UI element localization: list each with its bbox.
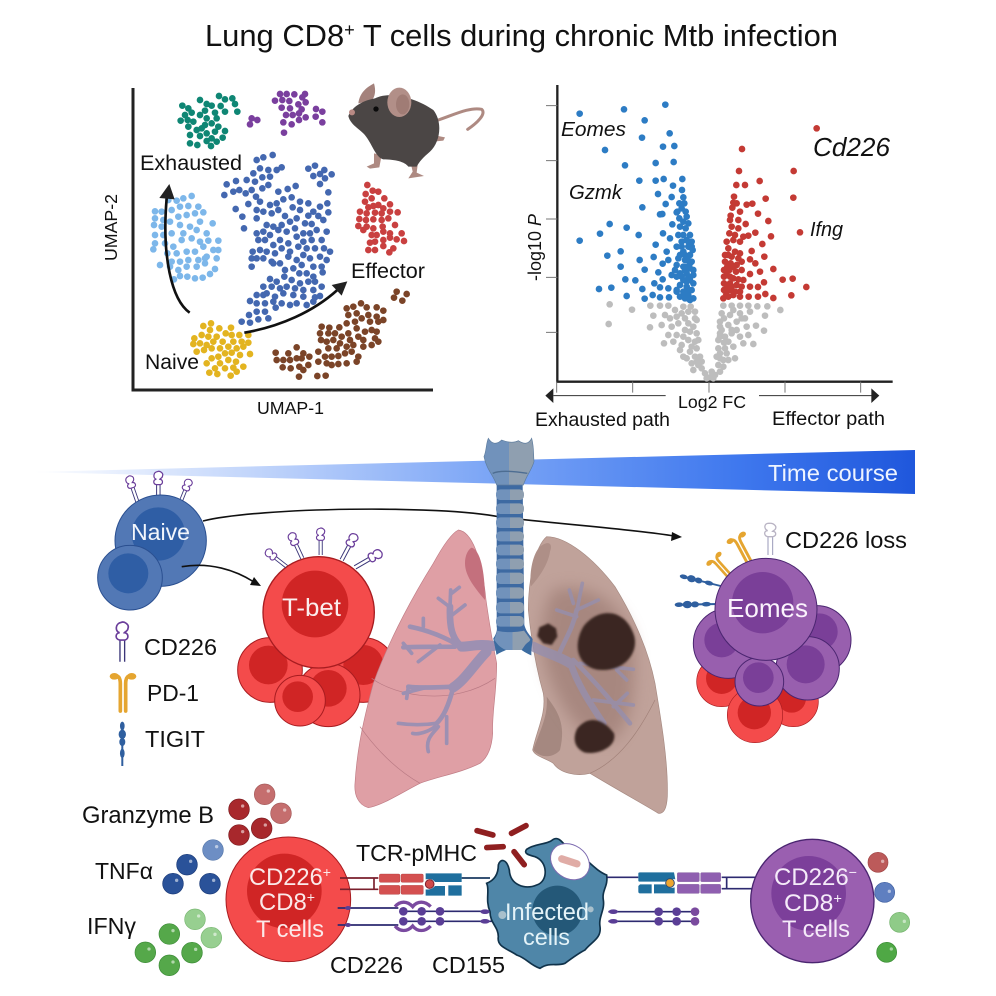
CD226-CD155 synapse left	[338, 902, 497, 930]
gold naive cluster	[193, 323, 250, 376]
label: CD8+ second: CD8	[784, 891, 831, 917]
x-axis label: Log2 FC	[678, 392, 746, 412]
label: PD-1: PD-1	[147, 680, 199, 706]
label: T cells second: T cells	[782, 917, 850, 943]
TIGIT receptors on Eomes cell	[675, 572, 722, 608]
label: Infected cells: Infected	[505, 900, 589, 926]
label: Naive cell: Naive	[131, 519, 190, 545]
arrow: naive to effector	[244, 281, 347, 333]
UMAP-2 axis label: UMAP-2	[101, 194, 121, 261]
cell: CD226+ CD8+ T cell	[226, 837, 351, 962]
label: CD226-: −	[849, 864, 857, 880]
brown cluster	[276, 292, 407, 377]
title: T cells during chronic Mtb infection	[355, 19, 838, 53]
cell: CD226- CD8+ T cell	[751, 839, 874, 963]
cell: Eomes cluster	[675, 523, 851, 743]
label: Granzyme B: Granzyme B	[82, 803, 214, 829]
UMAP axes	[133, 88, 433, 390]
left lung	[355, 530, 497, 808]
purple cells	[693, 558, 851, 706]
label: IFN gamma: IFNγ	[87, 913, 136, 939]
label: CD8+: CD8	[259, 890, 306, 916]
arrow: naive to exhausted	[159, 184, 190, 313]
right lung	[528, 537, 667, 813]
labels: cytokines	[82, 803, 214, 939]
icon: TIGIT	[119, 722, 126, 766]
label: Gzmk gene: Gzmk	[569, 181, 624, 204]
label: Cd226 gene: Cd226	[813, 132, 891, 162]
reduced cytokine spheres	[868, 852, 910, 962]
TCR-pMHC synapse right	[607, 872, 761, 893]
teal cluster	[181, 96, 237, 146]
non-significant grey points	[609, 304, 780, 378]
purple cluster	[250, 94, 322, 133]
icon: CD226	[116, 622, 128, 662]
time course wedge	[30, 450, 915, 494]
TCR-pMHC synapse left	[340, 873, 490, 896]
label: Time course: Time course	[768, 460, 898, 486]
arrow: exhausted path direction	[545, 388, 666, 403]
panel: UMAP plot	[101, 83, 483, 418]
label: Effector path: Effector path	[772, 408, 885, 430]
cytokine spheres	[135, 784, 291, 976]
label: CD8+ second: +	[833, 890, 842, 906]
downregulated blue points	[580, 105, 693, 300]
label: T cells: T cells	[256, 917, 324, 943]
faded CD226 receptor	[765, 523, 776, 555]
label: CD155: CD155	[432, 952, 505, 978]
label: TCR-pMHC: TCR-pMHC	[356, 840, 477, 866]
volcano axes and ticks	[546, 85, 893, 393]
label: CD226+: +	[323, 864, 331, 880]
blue cluster	[224, 155, 332, 323]
label: CD226: CD226	[144, 634, 217, 660]
red cells behind	[697, 657, 818, 743]
y-axis label: -log10 P	[525, 214, 545, 281]
lungs and trachea	[355, 438, 667, 813]
cell: Naive	[98, 471, 206, 610]
label: CD8+: +	[307, 889, 315, 905]
icon: PD-1	[110, 673, 136, 711]
trachea	[484, 438, 534, 655]
label: CD226-: CD226	[774, 865, 847, 891]
T-bet CD226 receptors	[264, 528, 384, 571]
label: Exhausted: Exhausted	[140, 151, 242, 175]
icon: mouse	[348, 83, 483, 178]
volcano points	[580, 105, 817, 378]
PD-1 receptors on Eomes cell	[705, 530, 759, 584]
label: CD226 ligand pair: CD226	[330, 952, 403, 978]
panel: volcano plot	[525, 85, 893, 431]
label: TIGIT: TIGIT	[145, 726, 205, 752]
label: Effector: Effector	[351, 259, 425, 283]
light blue cluster	[153, 196, 218, 279]
UMAP scatter clusters	[153, 94, 407, 377]
red effector cluster	[358, 185, 404, 252]
title: Lung CD8	[205, 19, 342, 53]
title: +	[344, 20, 355, 40]
upregulated red points	[723, 128, 817, 298]
label: Ifng gene: Ifng	[810, 219, 843, 241]
label: TNF alpha: TNFα	[95, 858, 153, 884]
CD155 stubs on infected cell left side	[480, 909, 490, 924]
label: T-bet: T-bet	[282, 594, 341, 622]
label: Eomes gene: Eomes	[561, 118, 626, 141]
arrow: effector path direction	[759, 388, 879, 403]
arrow: naive to Eomes	[203, 509, 682, 541]
legend: receptors	[110, 622, 217, 766]
label: Eomes: Eomes	[727, 593, 808, 623]
UMAP-1 axis label: UMAP-1	[257, 398, 324, 418]
label: CD226 loss: CD226 loss	[785, 527, 907, 553]
arrow: naive to T-bet	[182, 565, 261, 586]
cell: T-bet cluster	[238, 557, 396, 727]
label: Exhausted path: Exhausted path	[535, 409, 670, 431]
label: Naive: Naive	[145, 350, 199, 374]
CD155 unbound right	[608, 907, 699, 926]
cell: infected cell	[474, 822, 607, 968]
label: CD226+: CD226	[249, 865, 322, 891]
label: cells: cells	[523, 924, 570, 950]
